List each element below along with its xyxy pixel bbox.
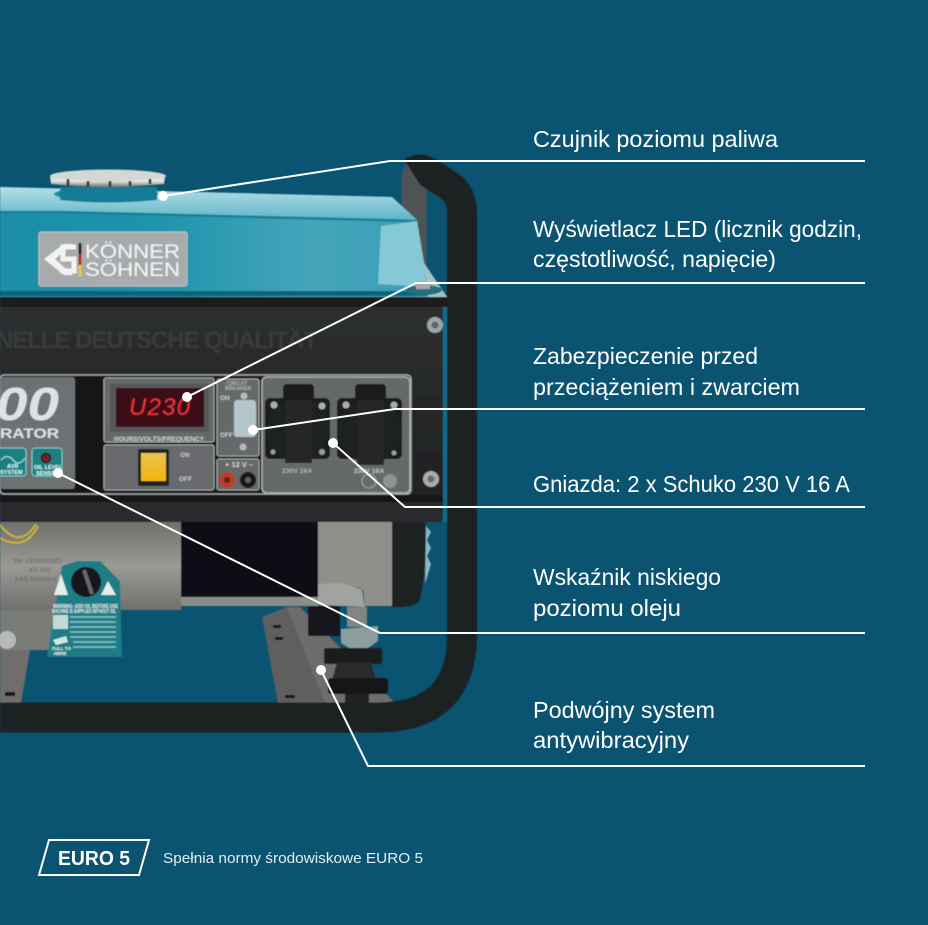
Schuko sockets panel: 230V 16A [354,468,384,475]
circuit breaker panel: ON [220,395,230,402]
mounting bracket left [0,650,30,703]
engine block [0,522,431,650]
leader line: anti-vibration [316,665,865,766]
engine block: K&S Germany [15,576,57,583]
label: low oil indicator: Wskaźnik niskiego [533,564,721,590]
label: overload and short-circuit protection: przeciążeniem i zwarciem [533,374,800,400]
fuel cap [50,170,166,202]
LED display panel [104,378,214,443]
left model panel: AVR [7,464,18,470]
fuel tank lid [0,187,447,297]
frame: rear handle leg [414,169,428,300]
circuit breaker panel [217,379,259,456]
circuit breaker panel: OFF [220,432,233,439]
label: sockets: Gniazda: 2 x Schuko 230 V 16 A [533,471,851,497]
circuit breaker panel: BREAKER [225,386,251,392]
label: low oil indicator: poziomu oleju [533,595,681,621]
generator photo [0,169,462,718]
leader line: sockets [328,438,865,507]
LED display panel: HOURS/VOLTS/FREQUENCY [114,436,204,443]
body housing [0,292,449,522]
Schuko sockets panel [262,377,410,493]
label: LED display: Wyświetlacz LED (licznik godzin, [533,216,862,242]
power switch panel [104,445,214,490]
brand logo plate: KÖNNER [85,242,180,263]
label: fuel level sensor: Czujnik poziomu paliwa [533,126,778,152]
12 V terminals: + 12 V – [225,460,253,469]
frame: front tube with handle [0,170,462,718]
left model panel: SYSTEM [0,470,23,476]
circuit breaker panel: CIRCUIT [227,381,247,387]
oil drain and glass cup [308,606,378,648]
leader line: low oil indicator [53,468,865,633]
brand logo plate: SÖHNEN [85,260,180,281]
anti-vibration mount [324,648,388,703]
label: overload and short-circuit protection: Zabezpieczenie przed [533,343,758,369]
EURO 5 badge [39,840,149,875]
LED display panel: U230 [129,394,191,421]
warning oil label: WARNING: ADD OIL BEFORE USE [53,604,118,610]
label: anti-vibration system: antywibracyjny [533,727,690,753]
warning oil label: MACHINE IS SUPPLIED WITHOUT OIL [52,609,116,615]
power switch panel: OFF [179,476,192,483]
engine block: KS 200 [29,567,51,574]
EURO 5 compliance note: Spełnia normy środowiskowe EURO 5 [163,850,423,867]
leader line: overload protection [248,409,865,435]
warning oil label [47,561,122,657]
EURO 5 badge: EURO 5 [58,848,130,870]
brand logo plate [39,232,187,286]
12 V terminals [217,459,259,490]
left model panel [0,377,75,489]
label: LED display: częstotliwość, napięcie) [533,246,776,272]
leader line: LED display [182,283,865,402]
left model panel: OIL LEVEL [34,465,63,471]
Schuko sockets panel: 230V 16A [282,468,312,475]
mounting bracket right [262,607,395,703]
left model panel: SENSOR [36,471,59,477]
power switch panel: ON [180,452,190,459]
warning oil label: FULL TO [52,646,71,651]
warning oil label: HERE [54,651,67,656]
control panel frame [0,375,411,494]
leader line: fuel level sensor [158,161,865,201]
label: anti-vibration system: Podwójny system [533,697,715,723]
body housing: NELLE DEUTSCHE QUALITÄT [0,327,318,354]
engine block: SN: 21000159Z3 [13,558,63,565]
left model panel: RATOR [0,426,59,441]
